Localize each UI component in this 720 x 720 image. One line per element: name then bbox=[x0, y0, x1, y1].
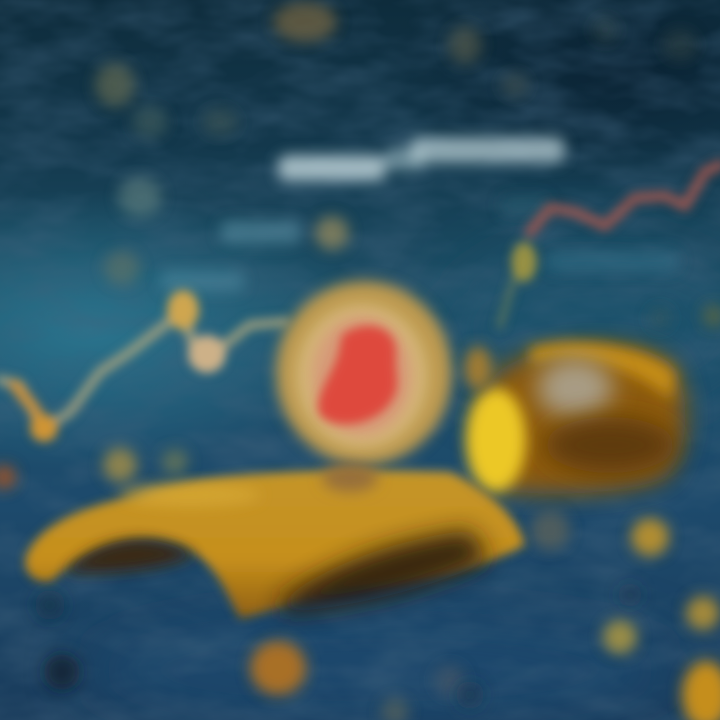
scattered gold coins bbox=[0, 304, 720, 720]
market chart line left bbox=[0, 290, 285, 442]
slab shadow bbox=[280, 530, 490, 612]
blurred title text block bbox=[278, 137, 565, 181]
bright yellow face bbox=[466, 388, 526, 492]
icon: red bitcoin symbol bbox=[318, 326, 397, 424]
gold slab foreground bbox=[25, 464, 525, 618]
gold ingot right bbox=[464, 343, 686, 494]
blurred subtitle labels bbox=[160, 195, 680, 292]
gold coin with red symbol bbox=[276, 281, 452, 465]
dark foreground specks bbox=[35, 583, 642, 709]
blurred background specks bbox=[95, 2, 698, 285]
red trend line upper right bbox=[500, 165, 720, 325]
